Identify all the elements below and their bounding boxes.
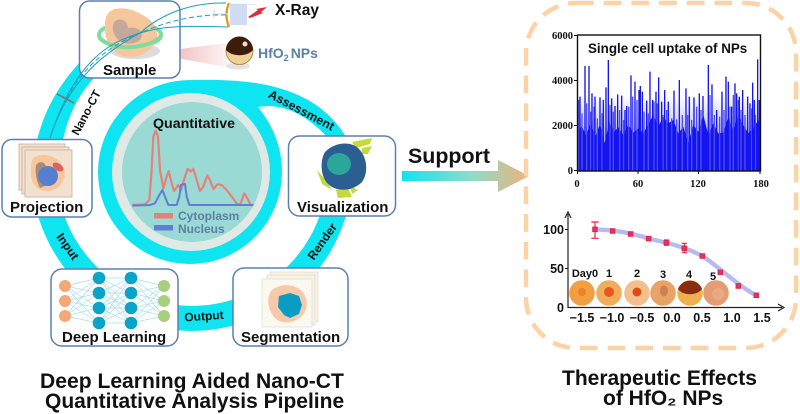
legend: nucleus: Nucleus: [178, 222, 225, 236]
nano-CT beam band: [37, 60, 96, 140]
label: x-ray: X-Ray: [275, 2, 319, 19]
histogram x labels: 0: [574, 179, 580, 190]
histogram x labels: 180: [753, 179, 769, 190]
day 4 dish: [677, 280, 703, 306]
segmented cytoplasm: [268, 285, 307, 322]
title: therapeutic effects: Therapeutic Effects: [562, 367, 757, 390]
icon: HfO2 nanoparticle: [226, 36, 253, 70]
day labels: Day0: [572, 268, 598, 280]
day 1 dish: [596, 280, 622, 306]
y labels: [543, 223, 564, 315]
support label: Support: [408, 144, 490, 168]
green ring front: [100, 35, 161, 47]
histogram title: Single cell uptake of NPs: [588, 41, 747, 56]
y tick marks: [565, 230, 568, 268]
day 2 dish: [624, 280, 650, 306]
chart: therapeutic response curve: [543, 212, 784, 325]
network edges: [65, 278, 164, 323]
label: deep learning: Deep Learning: [62, 329, 166, 346]
title: pipeline: Deep Learning Aided Nano-CT: [40, 370, 344, 393]
histogram x labels: 60: [633, 179, 643, 190]
pipeline cyan ring: [37, 60, 346, 318]
ring label: render: Render: [305, 220, 340, 262]
ring label: input: Input: [54, 230, 82, 263]
histogram frame: [578, 35, 760, 171]
icon: x-ray bolt: [248, 7, 267, 18]
projection organelle: [36, 162, 50, 188]
cytoplasm curve: [132, 131, 253, 205]
panel: sample: [80, 1, 180, 79]
nucleus curve: [132, 184, 253, 206]
title: therapeutic effects: [562, 367, 757, 410]
lens: [57, 94, 74, 103]
label: HfO2 NPs: HfO: [258, 45, 284, 61]
day 0 dish: [569, 280, 595, 306]
projection slices: [19, 144, 72, 197]
pink zoom fan to nanoparticle: [148, 43, 227, 67]
label: visualization: Visualization: [297, 199, 388, 216]
title: pipeline: Quantitative Analysis Pipeline: [45, 390, 344, 413]
x labels: −0.5: [630, 311, 654, 325]
nucleus: [113, 20, 142, 44]
output nodes: [158, 280, 170, 322]
nano-CT beam lines: [50, 3, 228, 138]
x labels: 0.5: [693, 311, 711, 325]
title: therapeutic effects: of HfO₂ NPs: [603, 387, 723, 410]
ring label: output: Output: [184, 308, 224, 325]
day labels: 2: [634, 268, 640, 280]
render scraps: [317, 138, 372, 198]
label: sample: Sample: [103, 62, 156, 79]
label: segmentation: Segmentation: [241, 329, 340, 346]
projection cell: [31, 155, 65, 191]
histogram y labels: 6000: [552, 31, 573, 42]
projection red body: [51, 161, 65, 173]
histogram y labels: 0: [568, 166, 573, 177]
histogram x labels: 120: [690, 179, 706, 190]
render blob: [322, 143, 366, 190]
slice stack: [262, 272, 318, 327]
dashed panel: [526, 3, 796, 348]
legend: cytoplasm: Cytoplasm: [178, 209, 239, 223]
label: projection: Projection: [10, 199, 83, 216]
panel: projection: [2, 140, 92, 217]
x labels: 0.0: [663, 311, 681, 325]
ring label: assessment: Assessment: [266, 87, 337, 134]
render core: [327, 153, 351, 175]
histogram y labels: 2000: [552, 121, 573, 132]
y labels: 0: [557, 301, 564, 315]
day labels: 3: [660, 269, 666, 281]
lower ring arc: [47, 200, 337, 318]
support arrow: [402, 160, 529, 192]
axis arrowheads: [565, 212, 784, 311]
ring label: nano-CT: Nano-CT: [68, 87, 104, 138]
histogram y labels: 4000: [552, 76, 573, 87]
chart: single cell uptake: [552, 31, 769, 190]
histogram y labels: [552, 31, 573, 177]
icon: x-ray detector: [212, 3, 257, 27]
projection nucleus: [38, 166, 58, 186]
hidden nodes: [93, 272, 137, 329]
histogram ticks: [574, 36, 760, 174]
x labels: −1.5: [570, 311, 594, 325]
central ring with assessment arm: [98, 80, 346, 264]
day labels: [572, 268, 716, 283]
icon: cell: [105, 8, 157, 57]
panel: visualization: [288, 136, 396, 216]
sample shadow: [110, 43, 160, 59]
curve axes: [568, 214, 782, 308]
histogram bars: [577, 59, 761, 171]
day 3 dish: [650, 280, 676, 306]
fitted line and points: [591, 222, 759, 298]
label: HfO2 NPs: 2: [284, 53, 289, 63]
x labels: [570, 311, 771, 325]
quantitative chart circle: [112, 93, 270, 251]
heading: quantitative: Quantitative: [153, 116, 235, 132]
label: HfO2 NPs: NPs: [291, 45, 318, 61]
grey ring: [112, 93, 270, 251]
day labels: 5: [710, 271, 716, 283]
y labels: 100: [543, 223, 564, 237]
day labels: 1: [606, 268, 612, 280]
culture images: [569, 280, 729, 306]
panel: segmentation: [233, 268, 348, 346]
teal disc: [122, 102, 262, 242]
y labels: 50: [550, 262, 564, 276]
segmented nucleus: [278, 293, 302, 318]
green ring back: [99, 23, 161, 47]
day labels: 4: [686, 269, 693, 281]
x labels: 1.0: [723, 311, 741, 325]
x labels: 1.5: [753, 311, 771, 325]
x labels: −1.0: [600, 311, 624, 325]
title: pipeline: [40, 370, 344, 413]
day 5 dish: [703, 280, 729, 306]
legend: nucleus: [154, 222, 225, 236]
input nodes: [59, 280, 71, 322]
panel: deep learning: [51, 269, 178, 346]
histogram x labels: [574, 179, 769, 190]
